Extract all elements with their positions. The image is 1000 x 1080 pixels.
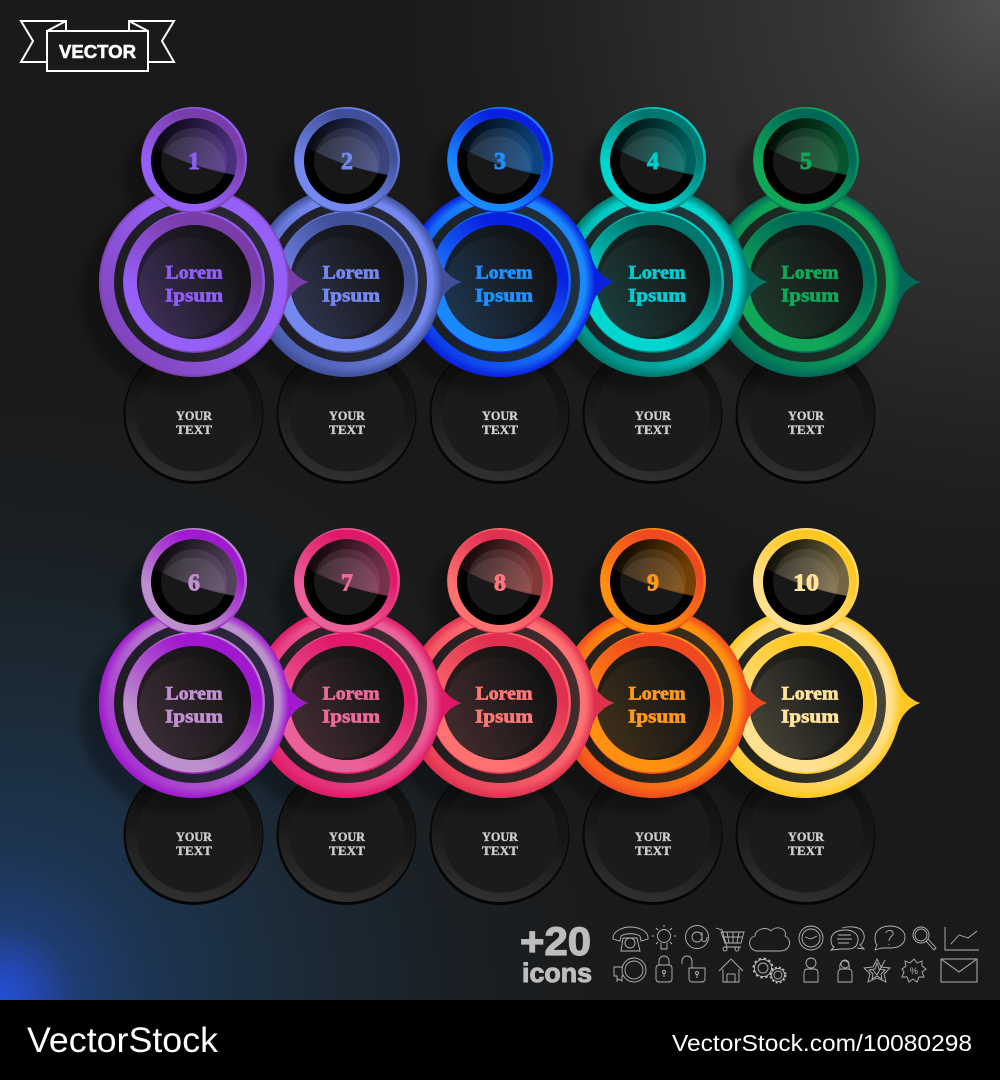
text disc 9: TEXT	[635, 844, 672, 858]
step 1 badge	[81, 107, 308, 393]
text disc 6: YOUR	[176, 830, 213, 844]
step 5 badge: 5	[800, 149, 812, 175]
step 2 badge	[234, 107, 461, 393]
icon: man	[804, 958, 818, 982]
icon: envelope	[941, 959, 977, 982]
step 6 badge: 6	[188, 570, 200, 596]
text disc 3: YOUR	[482, 409, 519, 423]
icon: light bulb	[652, 925, 676, 949]
step 2 badge: Lorem	[322, 262, 380, 284]
step 3 badge: Lorem	[476, 262, 533, 284]
step 2 badge: Ipsum	[322, 286, 380, 306]
step 8 badge: Lorem	[476, 684, 533, 704]
text disc 5: TEXT	[788, 423, 825, 437]
step 6 badge	[81, 528, 308, 814]
icon: house	[719, 959, 743, 982]
text disc 8: TEXT	[482, 844, 519, 858]
icon: gears	[754, 958, 786, 982]
icon count heading: +20	[520, 920, 591, 964]
text disc 4: YOUR	[635, 409, 672, 423]
step 7 badge: 7	[341, 570, 353, 596]
step 4 badge: Lorem	[628, 262, 686, 284]
text disc 6: TEXT	[176, 844, 213, 858]
icon count heading: icons	[522, 958, 592, 988]
step 4 badge: Ipsum	[628, 286, 686, 306]
icon: line chart	[945, 927, 979, 950]
text disc 10: TEXT	[788, 844, 825, 858]
icon: question bubble	[875, 926, 905, 950]
step 10 badge	[693, 528, 920, 814]
step 1 badge: 1	[188, 149, 200, 175]
step 2 badge: 2	[341, 149, 353, 175]
text disc 1	[124, 344, 264, 484]
step 6 badge: Lorem	[166, 684, 223, 704]
text disc 5: YOUR	[788, 409, 825, 423]
icon: open lock	[682, 956, 705, 982]
vector ribbon badge: VECTOR	[59, 41, 136, 62]
text disc 1: YOUR	[176, 409, 213, 423]
step 9 badge: Ipsum	[628, 706, 686, 728]
step 6 badge: Ipsum	[165, 706, 223, 728]
icon set	[613, 925, 979, 982]
text disc 4	[582, 344, 722, 484]
step 5 badge	[693, 107, 920, 393]
footer bar: VectorStock	[27, 1021, 219, 1060]
text disc 6	[124, 765, 264, 905]
text disc 8	[430, 765, 570, 905]
step 5 badge: Ipsum	[781, 286, 839, 306]
text disc 2	[276, 344, 416, 484]
text disc 9: YOUR	[635, 830, 672, 844]
text disc 7: TEXT	[329, 844, 366, 858]
step 1 badge: Ipsum	[165, 286, 223, 306]
step 9 badge: 9	[647, 570, 659, 596]
step 3 badge: 3	[494, 149, 506, 175]
step 3 badge: Ipsum	[475, 286, 533, 306]
icon: telephone	[613, 927, 648, 951]
text disc 7	[276, 765, 416, 905]
text disc 8: YOUR	[482, 830, 519, 844]
step 8 badge	[387, 528, 614, 814]
icon: lock	[656, 956, 672, 982]
step 8 badge: Ipsum	[475, 706, 533, 728]
icon: clock	[799, 926, 823, 950]
text disc 10	[736, 765, 876, 905]
icon: key	[614, 958, 646, 982]
step 9 badge: Lorem	[628, 684, 686, 704]
text disc 2: TEXT	[329, 423, 366, 437]
vector ribbon badge	[21, 21, 174, 71]
icon: at sign	[686, 926, 708, 948]
footer bar	[0, 1000, 1000, 1080]
step 4 badge	[540, 107, 767, 393]
icon: magnifier	[913, 927, 936, 950]
text disc 7: YOUR	[329, 830, 366, 844]
step 4 badge: 4	[647, 149, 659, 175]
text disc 3: TEXT	[482, 423, 519, 437]
step 8 badge: 8	[494, 570, 506, 596]
text disc 1: TEXT	[176, 423, 213, 437]
step 1 badge: Lorem	[166, 262, 223, 284]
footer bar: VectorStock.com/10080298	[672, 1030, 972, 1056]
text disc 5	[736, 344, 876, 484]
icon: woman	[838, 960, 852, 982]
icon: chat bubbles	[831, 927, 864, 950]
text disc 10: YOUR	[788, 830, 825, 844]
icon: cloud	[750, 928, 790, 951]
step 9 badge	[540, 528, 767, 814]
icon count heading	[520, 920, 592, 988]
step 7 badge: Ipsum	[322, 706, 380, 728]
step 10 badge: Lorem	[782, 684, 839, 704]
step 7 badge: Lorem	[322, 684, 380, 704]
text disc 2: YOUR	[329, 409, 366, 423]
icon: shopping cart	[716, 928, 744, 951]
icon: star with check	[864, 959, 890, 982]
text disc 9	[582, 765, 722, 905]
step 3 badge	[387, 107, 614, 393]
step 5 badge: Lorem	[782, 262, 839, 284]
text disc 3	[430, 344, 570, 484]
icon: discount burst	[902, 959, 926, 982]
icon: discount burst: %	[910, 966, 918, 976]
step 10 badge: Ipsum	[781, 706, 839, 728]
step 10 badge: 10	[793, 570, 819, 596]
text disc 4: TEXT	[635, 423, 672, 437]
step 7 badge	[234, 528, 461, 814]
